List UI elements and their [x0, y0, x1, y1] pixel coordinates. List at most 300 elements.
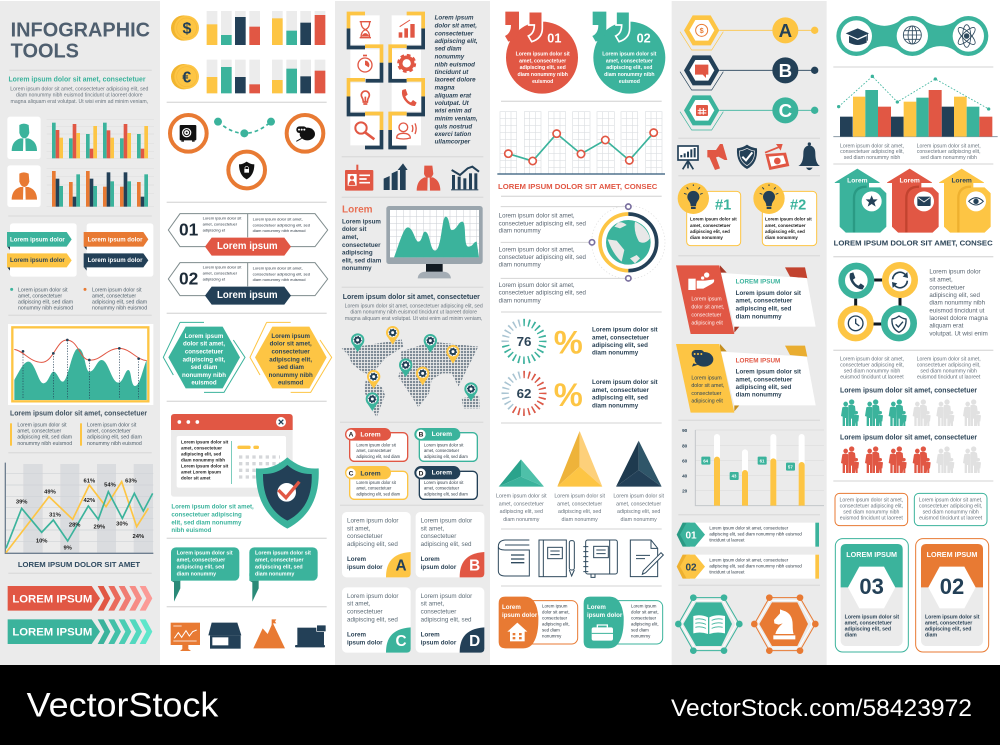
card B: Lorem — [421, 556, 440, 563]
info tab: teal briefcase — [584, 597, 663, 648]
bullet text blocks: adipiscing elit, sed diam — [92, 299, 147, 305]
arrow tab: red mail — [887, 169, 938, 232]
idea card 2: Lorem ipsum dolor sit — [765, 217, 812, 222]
icon: message — [695, 65, 708, 78]
text block beside circles: euismod tincidunt ut — [929, 307, 985, 314]
panel: numbered block 02: diam nonummy nibh euismod — [253, 277, 306, 282]
idea card 1: Lorem ipsum dolor sit — [690, 217, 737, 222]
two text columns: Lorem ipsum dolor sit amet, — [917, 357, 981, 363]
chart caption text: consectetuer adipiscing elit, — [840, 149, 904, 155]
icon: monitor — [171, 623, 200, 651]
timeline C: C — [779, 100, 792, 121]
icon: globe outline — [903, 26, 921, 44]
numbered row 02 — [677, 555, 819, 579]
heading: LOREM IPSUM DOLOR SIT AMET, CONSEC — [834, 239, 993, 248]
chain of three icons — [836, 16, 988, 56]
line chart: 24% — [132, 534, 145, 540]
italic text block: aliquam erat — [435, 92, 472, 99]
label A: A — [349, 432, 354, 439]
icon: shield check — [737, 145, 757, 169]
line chart: 63% — [125, 478, 138, 484]
hexagon icon: open book — [675, 594, 743, 654]
pyramid captions: Lorem ipsum dolor sit — [496, 494, 547, 500]
bubble 1: Lorem ipsum dolor sit — [177, 551, 233, 557]
icon: light bulb — [361, 91, 369, 104]
arrow banner: teal — [8, 619, 152, 644]
icon: calendar — [696, 105, 708, 116]
numbered row 02: 02 — [685, 562, 697, 573]
circle diagram — [841, 265, 915, 338]
label C: adipiscing elit, sed diam — [356, 492, 401, 497]
ribbon: yellow — [7, 253, 72, 271]
text block beside circles: sit amet, — [929, 276, 953, 283]
label A: amet, consectetuer — [356, 448, 392, 453]
label B: B — [419, 432, 424, 439]
card D: sit amet, — [421, 601, 444, 608]
panel: numbered block 02: Lorem ipsum dolor sit amet, — [253, 265, 303, 270]
gauge 62 percent: % — [554, 376, 583, 413]
hexagon callout: teal — [163, 322, 245, 392]
info tab: orange house: consectetuer — [542, 615, 568, 620]
teal text block: consectetuer adipiscing — [171, 511, 242, 518]
globe diagram: Lorem ipsum dolor sit amet, — [499, 282, 575, 289]
label D: Lorem ipsum dolor sit — [424, 480, 464, 485]
globe diagram: diam nonummy — [499, 262, 542, 269]
bullet text blocks: nonummy nibh euismod — [18, 306, 73, 312]
pins — [351, 326, 478, 411]
speech bubbles — [171, 547, 318, 602]
line chart heading: LOREM IPSUM DOLOR SIT AMET — [18, 560, 141, 569]
pyramid captions: adipiscing elit, sed — [617, 509, 660, 515]
folded banner: yellow: consectetuer — [691, 391, 722, 397]
icon: mountain — [253, 619, 285, 648]
chart caption: Lorem ipsum dolor sit amet, consectetuer — [10, 410, 147, 417]
line chart: 54% — [104, 483, 117, 489]
icon row: id card, chart, person — [345, 163, 479, 191]
card A: adipiscing elit, sed — [347, 541, 398, 548]
hexagon callout: teal: euismod — [191, 380, 217, 387]
icon: bulb — [684, 184, 703, 209]
globe diagram: consectetuer adipiscing elit, sed — [499, 254, 587, 261]
number card 02: diam — [925, 632, 937, 638]
chart caption text: sed diam nonummy nibh — [844, 155, 900, 161]
panel: browser window with shield: diam nonummy nibh — [181, 457, 225, 462]
panel: browser window with shield: adipiscing elit, sed — [181, 451, 222, 456]
italic text block: ullamcorper — [435, 139, 471, 146]
bar chart: teal red yellow — [52, 123, 148, 158]
monitor block text: Lorem ipsum — [342, 218, 381, 225]
red chart heading: LOREM IPSUM DOLOR SIT AMET, CONSEC — [498, 182, 658, 191]
numbered row 02: Lorem ipsum dolor sit amet, consectetuer — [709, 557, 789, 562]
quote bubble 02: adipiscing elit, sed — [606, 65, 652, 71]
hexagon callout: teal: sed diam — [191, 364, 218, 371]
italic text block: dolor sit amet, — [435, 23, 477, 30]
number card 03: diam — [845, 632, 857, 638]
card D: ipsum dolor — [421, 639, 457, 646]
ribbon: orange: Lorem ipsum dolor — [88, 237, 143, 243]
icon: globe — [606, 220, 651, 265]
chart caption: adipiscing elit, sed diam — [87, 435, 142, 441]
folded banner: red: LOREM IPSUM — [736, 279, 780, 286]
line chart: 31% — [49, 513, 62, 519]
panel: numbered block 02: amet, consectetuer — [203, 270, 238, 275]
two text columns: consectetuer adipiscing elit, — [840, 363, 904, 369]
icon: chat — [692, 350, 713, 367]
chart caption: amet, consectetuer — [87, 429, 131, 435]
idea card 2: amet, consectetuer — [765, 223, 806, 228]
icon: chat bubbles — [287, 115, 323, 152]
icon: stopwatch — [358, 55, 372, 72]
folded banner: red: adipiscing elit — [691, 320, 723, 326]
number card 02: LOREM IPSUM — [927, 550, 977, 559]
line chart: 61% — [83, 479, 96, 485]
info tab: teal briefcase: sed diam — [631, 628, 649, 633]
line chart — [5, 463, 153, 553]
card A: Lorem ipsum dolor — [347, 518, 398, 525]
panel: numbered block 01: diam nonummy nibh euismod — [253, 228, 306, 233]
quote bubble 02: 02 — [637, 32, 651, 46]
idea card 1: #1 — [715, 197, 731, 213]
icon: rising bars with arrow — [384, 163, 408, 190]
chart caption: nonummy nibh euismod — [17, 441, 72, 447]
line chart: 28% — [69, 523, 81, 529]
quote bubble 01: diam nonummy nibh — [517, 72, 568, 78]
thermometer bar chart: 90 — [682, 428, 688, 433]
italic text block: magna — [435, 85, 455, 92]
teal text block: Lorem ipsum dolor sit amet, — [171, 504, 254, 511]
panel: three ring icons — [170, 115, 323, 188]
globe diagram: Lorem ipsum dolor sit amet, — [499, 246, 575, 253]
outlined text box: teal — [914, 493, 987, 526]
label D: amet, consectetuer — [424, 486, 460, 491]
icon: notebook with pencil — [539, 540, 574, 577]
bullet text blocks: amet, consectetuer — [18, 293, 62, 299]
info tab: teal briefcase: nonummy — [631, 634, 651, 639]
label D — [414, 466, 477, 499]
icon: shield with check — [256, 457, 319, 529]
hexagon callout: teal: adipiscing elit, — [183, 356, 226, 363]
footer: image id: VectorStock.com/58423972 — [671, 695, 972, 722]
two text columns: Lorem ipsum dolor sit amet, — [840, 357, 904, 363]
people chart: red — [840, 434, 981, 473]
outlined text box: orange: sed diam nonummy nibh — [843, 510, 900, 516]
hexagon icon: chess knight — [751, 594, 819, 654]
globe diagram: consectetuer adipiscing elit, sed — [499, 290, 587, 297]
ribbon: orange — [84, 232, 148, 250]
bubble 2: amet, consectetuer — [255, 558, 304, 564]
chart caption text — [840, 143, 981, 161]
panel: browser window with shield: amet, consectetuer — [181, 445, 222, 450]
info tab: orange house: adipiscing elit, — [542, 622, 570, 627]
text block beside circles: aliquam erat — [929, 323, 964, 330]
icon: euro coin — [171, 64, 199, 89]
panel: numbered block 02: Lorem ipsum dolor sit — [203, 264, 242, 269]
folded banner: red: consectetuer — [691, 312, 722, 318]
thermometer bar chart: 43 — [732, 474, 737, 479]
timeline A — [680, 15, 818, 50]
intro text block: magna aliquam erat volutpat. Ut wisi enim ad minim veniam, — [11, 99, 148, 105]
area chart panel — [8, 324, 153, 405]
monitor block text: Lorem — [342, 204, 373, 215]
panel: browser window with shield: Lorem ipsum dolor sit — [181, 439, 229, 444]
two text columns: euismod tincidunt ut laoreet — [917, 375, 981, 381]
bar chart: dollar — [207, 11, 325, 45]
hexagon callout: teal: consectetuer — [185, 349, 224, 356]
label A — [345, 428, 408, 461]
panel: numbered block 01 — [168, 214, 328, 256]
icon: coin: $ — [700, 26, 704, 35]
monitor block text: amet, — [342, 234, 358, 241]
chart caption text: sed diam nonummy nibh — [920, 155, 977, 161]
icon row: business — [171, 619, 326, 651]
gauge 76 percent: 76 — [517, 334, 531, 349]
icon: briefcase — [592, 625, 613, 641]
label: red: Lorem ipsum — [217, 241, 278, 252]
folded banner: red: amet, consectetuer — [736, 298, 793, 305]
panel: numbered block 01: Lorem ipsum dolor sit — [203, 215, 242, 220]
arrow tab: teal star — [835, 169, 886, 232]
icon: spiral notebook — [583, 540, 617, 577]
bar chart: euro — [207, 60, 325, 93]
folded banner: red: adipiscing elit, sed — [736, 306, 792, 313]
gauge 62 percent — [505, 374, 658, 413]
pyramid captions: adipiscing elit, sed — [558, 509, 601, 515]
folded banner: yellow: Lorem ipsum dolor sit — [736, 369, 801, 376]
folded banner: yellow: amet, consectetuer — [736, 376, 793, 383]
card D — [416, 587, 484, 653]
hexagon callout: yellow: euismod — [278, 380, 304, 387]
card A: ipsum dolor — [347, 564, 383, 571]
intro text block: Lorem ipsum dolor sit amet, consectetuer — [8, 77, 146, 84]
icon: dollar coin: $ — [183, 21, 192, 38]
thermometer bar chart: 61 — [760, 458, 765, 463]
number card 02: adipiscing elit, sed — [925, 626, 971, 632]
monitor block text: nonummy — [342, 265, 372, 272]
world map with pins — [342, 326, 480, 417]
ribbon: navy: Lorem ipsum dolor — [88, 258, 143, 264]
italic text block: adipiscing elit, — [435, 38, 478, 45]
idea card 2 — [753, 183, 817, 246]
panel: numbered block 02: adipiscing et — [203, 276, 226, 281]
pyramid captions: Lorem ipsum dolor sit — [554, 494, 606, 500]
timeline B: B — [779, 60, 792, 81]
globe diagram: diam nonummy — [499, 228, 542, 235]
arrow banner: red — [8, 586, 152, 611]
arrow banner: teal: LOREM IPSUM — [12, 627, 92, 639]
folded banner: yellow: dolor sit amet, — [691, 383, 724, 389]
card A: Lorem — [347, 556, 366, 563]
quote bubble 01: Lorem ipsum dolor sit — [516, 51, 570, 57]
folded banner: red: Lorem ipsum — [691, 297, 722, 303]
icon: phone ring — [842, 266, 871, 295]
card D: consectetuer — [421, 608, 456, 615]
info tab: orange house — [499, 597, 578, 648]
icon: hand with coins — [688, 272, 714, 290]
card B: sit amet, — [421, 525, 444, 532]
bullet text blocks: adipiscing elit, sed diam — [18, 299, 73, 305]
outlined text box: orange: consectetuer adipiscing elit, — [840, 504, 903, 510]
icon: magnifier — [355, 122, 374, 139]
icon: document with pen — [630, 540, 663, 577]
idea card 2: diam nonummy — [765, 235, 798, 240]
globe diagram — [499, 204, 665, 304]
pyramid: teal — [499, 459, 544, 487]
label A: Lorem — [360, 432, 381, 439]
combined bar chart — [833, 75, 998, 137]
gauge 76 percent — [505, 322, 658, 360]
icon: money with arrow — [765, 144, 789, 170]
outlined text box: teal: sed diam nonummy nibh — [923, 510, 979, 516]
card A: A — [395, 558, 407, 575]
folded banner: yellow: LOREM IPSUM — [736, 357, 780, 364]
text block beside circles: laoreet dolore magna — [929, 315, 988, 322]
numbered row 01: Lorem ipsum dolor sit amet, consectetuer — [709, 525, 789, 530]
italic text block: nibh euismod — [435, 61, 475, 68]
arrow tab: red mail: Lorem — [899, 177, 920, 184]
label A: Lorem ipsum dolor sit — [356, 442, 397, 447]
text block beside circles: consectetuer — [929, 284, 965, 291]
icon: megaphone — [707, 144, 727, 170]
outlined text box: orange: euismod tincidunt ut laoreet — [840, 516, 903, 522]
bullet text blocks: amet, consectetuer — [92, 293, 136, 299]
icon: refresh ring — [885, 265, 915, 295]
numbered row 02: tincidunt ut laoreet — [709, 569, 745, 574]
folded banner: red: dolor sit amet, — [691, 304, 724, 310]
gauge 62 percent: Lorem ipsum dolor sit — [592, 379, 658, 386]
bubble 1 — [171, 547, 239, 602]
monitor block text: consectetuer — [342, 242, 381, 249]
quote bubble 02: euismod — [619, 79, 640, 85]
thermometer bar chart: 40 — [682, 473, 688, 478]
card A — [342, 512, 411, 577]
label B: Lorem ipsum dolor sit — [424, 442, 464, 447]
panel: browser window with shield: amet Lorem ipsum — [181, 469, 221, 474]
label D: D — [419, 470, 424, 477]
line chart: 9% — [63, 545, 73, 551]
gauge 76 percent: Lorem ipsum dolor sit — [592, 327, 658, 334]
line chart: 42% — [83, 498, 96, 504]
panel: numbered block 01: consectetuer adipiscing elit, sed — [253, 222, 310, 227]
gauge 62 percent: amet, consectetuer — [592, 387, 650, 394]
ribbon: navy — [84, 253, 148, 271]
panel: numbered block 02: 02 — [179, 268, 198, 288]
chart caption — [10, 410, 147, 447]
icon: atom — [956, 25, 978, 47]
icon: laptop — [295, 625, 326, 647]
map heading and text: Lorem ipsum dolor sit amet, consectetuer adipiscing elit, sed — [345, 304, 483, 310]
pyramid captions: amet, consectetuer — [499, 501, 544, 507]
panel: numbered block 01: Lorem ipsum dolor sit amet, — [253, 216, 303, 221]
chart caption: Lorem ipsum dolor sit — [87, 423, 137, 429]
intro text block — [8, 77, 149, 105]
icon: clock ring — [841, 309, 870, 338]
map heading and text: magna aliquam erat volutpat. Ut wisi enim ad minim veniam, — [345, 316, 482, 322]
thermometer bar chart: 64 — [703, 458, 709, 463]
label D: adipiscing elit, sed diam — [424, 492, 468, 497]
quote bubble 02: amet, consectetuer — [606, 58, 653, 64]
thermometer bar chart: 57 — [788, 464, 793, 469]
info tab: teal briefcase: Lorem — [587, 604, 606, 611]
italic text block: sed diam — [435, 46, 462, 53]
bubble 2: adipiscing elit, sed — [255, 565, 303, 571]
card C: Lorem — [347, 631, 366, 638]
pyramid: navy — [616, 441, 662, 487]
quote bubble 01: adipiscing elit, sed — [520, 65, 566, 71]
icon: dollar coin — [171, 15, 199, 41]
info tab: teal briefcase: dolor sit amet, — [631, 610, 659, 615]
card B: B — [469, 558, 480, 575]
folded banner: red: Lorem ipsum dolor sit — [736, 290, 801, 297]
label C: Lorem ipsum dolor sit — [356, 480, 397, 485]
icon: safe — [170, 115, 207, 152]
teal text block: elit, sed diam nonummy — [171, 519, 242, 526]
number card 03: amet, consectetuer — [845, 620, 892, 626]
icon: growth bars — [399, 20, 415, 38]
card C: ipsum dolor — [347, 639, 383, 646]
ribbon: teal: Lorem ipsum dolor — [10, 237, 65, 243]
idea card 1 — [678, 183, 741, 246]
info tab: teal briefcase: adipiscing elit, — [631, 622, 659, 627]
panel: numbered block 02 — [168, 263, 328, 305]
footer: brand: VectorStock — [27, 687, 219, 725]
line chart: 10% — [36, 538, 48, 544]
gauge 62 percent: diam nonummy — [592, 402, 639, 409]
bubble 1: adipiscing elit, sed — [177, 565, 224, 571]
icon: person speaking — [397, 123, 416, 139]
idea card 2: adipiscing elit, sed — [765, 229, 805, 234]
idea card 1: amet, consectetuer — [690, 223, 731, 228]
ribbon: teal — [7, 232, 72, 250]
panel: coin bar charts — [171, 11, 325, 93]
panel: icon grid — [347, 12, 478, 149]
outlined text box: orange — [835, 493, 908, 526]
icon: bulb — [760, 184, 778, 209]
panel: ribbon labels — [7, 223, 153, 277]
info tab: orange house: ipsum dolor — [502, 612, 538, 619]
idea card 1: diam nonummy — [690, 235, 723, 240]
card C: C — [395, 633, 407, 650]
number card 02: 02 — [940, 574, 964, 599]
arrow tab: teal star: Lorem — [847, 177, 868, 184]
icon row: books — [498, 540, 663, 577]
text block beside circles — [929, 269, 988, 338]
thermometer bar chart: 60 — [682, 459, 688, 464]
label B: Lorem — [432, 431, 452, 438]
line chart with markers — [497, 112, 665, 174]
pyramid captions: adipiscing elit, sed — [500, 509, 543, 515]
text block beside circles: diam nonummy nibh — [929, 300, 986, 307]
timeline A: A — [779, 20, 792, 41]
folded banner: red: diam nonummy — [736, 313, 782, 320]
icon: presentation board — [678, 146, 698, 169]
label B: adipiscing elit, sed diam — [424, 454, 468, 459]
hexagon callout: yellow — [250, 322, 332, 392]
pyramid captions: amet, consectetuer — [557, 501, 602, 507]
italic text block: exerci tation — [435, 131, 471, 138]
timeline B — [680, 55, 818, 90]
quote bubble 02: Lorem ipsum dolor sit — [602, 51, 657, 57]
info tab: orange house: nonummy — [542, 634, 562, 639]
icon: gear — [398, 55, 415, 72]
label D: Lorem — [432, 470, 452, 477]
label: navy — [205, 287, 291, 305]
number card 03: LOREM IPSUM — [846, 550, 897, 559]
italic text block: laoreet dolore — [435, 77, 476, 84]
pyramids — [496, 431, 665, 523]
card B — [416, 512, 484, 577]
panel: A B C D labels — [345, 428, 477, 499]
icon: bell — [798, 142, 820, 170]
